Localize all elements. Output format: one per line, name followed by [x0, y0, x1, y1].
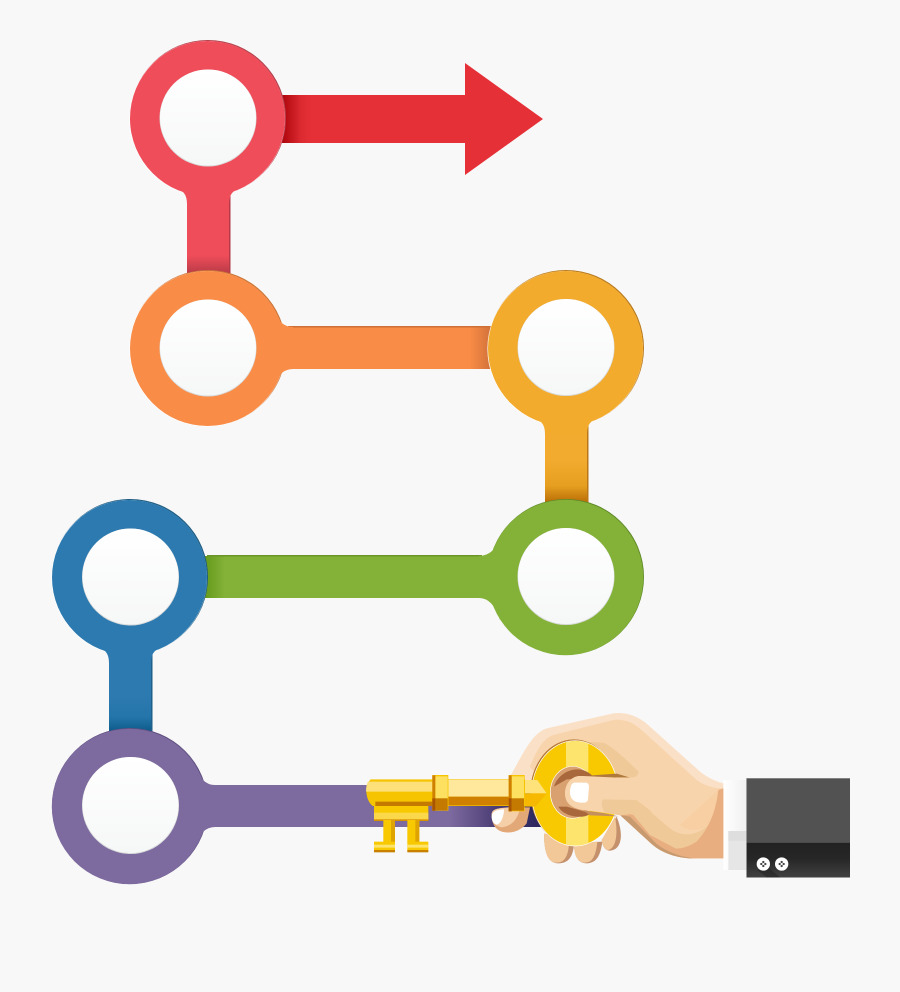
index finger — [565, 774, 652, 816]
key collars — [432, 775, 525, 811]
connector: green horizontal — [200, 555, 500, 598]
connector: orange horizontal — [280, 326, 495, 369]
arrow: red — [280, 63, 543, 175]
connector: amber vertical — [545, 420, 588, 505]
connector: purple horizontal — [202, 785, 545, 827]
hand back — [510, 713, 723, 858]
node 2: orange circle — [129, 270, 293, 427]
node 5: blue circle — [51, 499, 208, 663]
sleeve buttons — [757, 857, 788, 871]
connector: red vertical — [187, 190, 230, 276]
jacket sleeve — [746, 778, 850, 878]
key shaft — [366, 779, 547, 807]
hand holding key — [366, 713, 850, 878]
shirt cuff — [723, 780, 747, 870]
infographic — [52, 40, 850, 884]
node 4: green circle — [479, 499, 644, 655]
node 6: purple circle — [52, 728, 215, 884]
hand shading — [580, 742, 723, 858]
thumb — [492, 807, 530, 833]
key bow — [530, 739, 617, 846]
node 3: amber circle — [487, 270, 644, 434]
lower fingers — [544, 817, 621, 863]
connector: blue vertical — [109, 649, 152, 734]
node 1: red circle — [129, 40, 286, 204]
key teeth — [374, 802, 428, 852]
